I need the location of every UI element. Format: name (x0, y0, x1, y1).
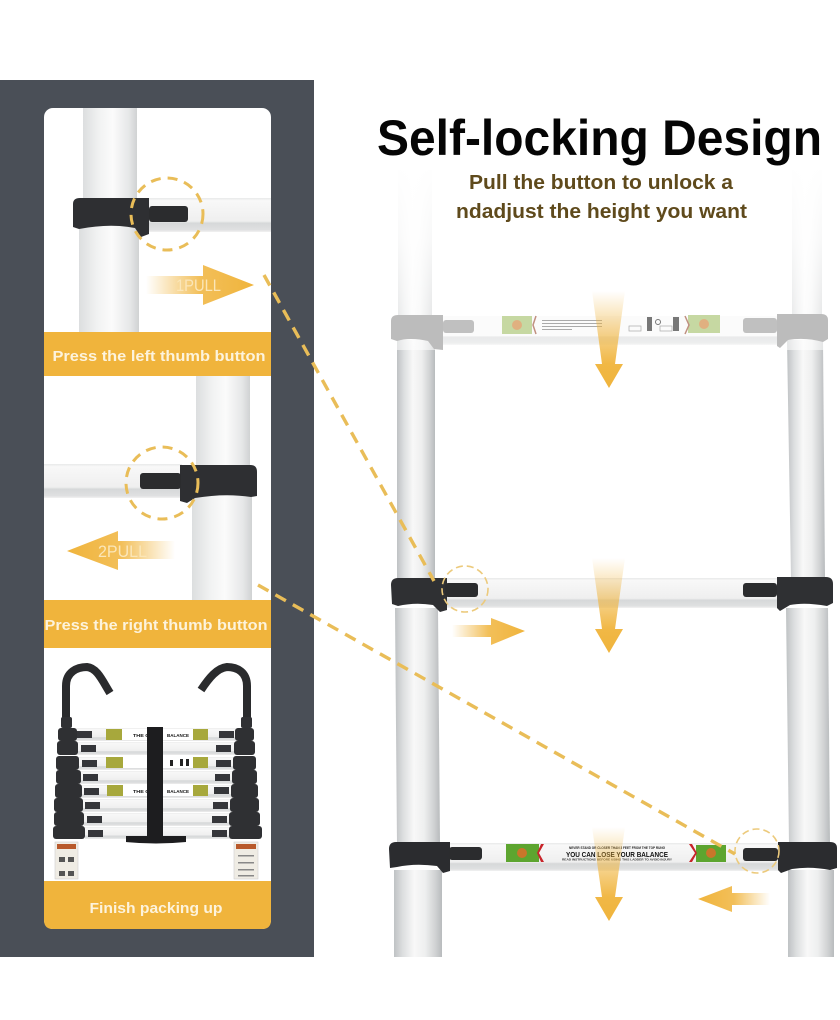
step 2 (44, 376, 271, 648)
arrow: 2PULL (67, 531, 175, 570)
top fade (385, 165, 835, 350)
caption band (44, 881, 271, 929)
rung labels: THE CAN (133, 733, 157, 738)
rung 1 faded (391, 314, 828, 350)
left clamp (389, 842, 450, 873)
rung labels (106, 729, 208, 796)
dashed connector: step 1 (264, 275, 434, 581)
clamp (180, 465, 257, 503)
left clamp stack (53, 728, 85, 839)
rung safety label: READ INSTRUCTIONS BEFORE USING THIS LADDER TO AVOID INJURY (562, 858, 672, 862)
panel: dark sidebar (0, 80, 314, 957)
rung (44, 464, 182, 498)
clamp (73, 198, 149, 237)
pole (79, 108, 139, 332)
pole (192, 376, 252, 600)
main ladder (385, 165, 837, 957)
caption band: Finish packing up (90, 900, 222, 917)
arrow: 2PULL: 2PULL (98, 542, 147, 561)
left pole (394, 170, 442, 957)
title: Self-locking Design (377, 110, 822, 166)
right clamp (778, 842, 837, 873)
step 1 (44, 108, 271, 376)
rung labels: BALANCE (167, 789, 189, 794)
left button (445, 583, 478, 597)
dashed circle (126, 447, 198, 519)
arrow: down 1 (592, 291, 625, 388)
arrow: 1PULL: 1PULL (176, 276, 221, 295)
hooks (66, 667, 247, 720)
rung labels: THE CAN (133, 789, 157, 794)
left clamp (391, 315, 443, 350)
rung label (502, 315, 720, 334)
folded rungs (76, 728, 236, 839)
caption band (44, 600, 271, 648)
panel: white steps card (44, 108, 271, 929)
rung labels: BALANCE (167, 733, 189, 738)
button (149, 206, 188, 222)
right pole (786, 170, 834, 957)
arrow: left on rung 3 (698, 886, 770, 912)
dashed circle: rung 3 (735, 829, 779, 873)
rung (148, 198, 271, 232)
thumb buttons (77, 731, 234, 837)
right clamp (777, 314, 828, 348)
rung 2 (391, 577, 833, 612)
left clamp (391, 578, 447, 612)
arrow: down 2 (592, 558, 625, 653)
left button (443, 320, 474, 333)
rung safety label: YOU CAN LOSE YOUR BALANCE (566, 850, 668, 859)
arrow: down 3 (592, 827, 625, 921)
caption band: Press the right thumb button (44, 617, 268, 634)
rung safety label: NEVER STAND OR CLOSER THAN 3 FEET FROM THE TOP RUNG (569, 846, 665, 850)
rung 3 (389, 842, 837, 873)
button (140, 473, 181, 489)
right clamp (777, 577, 833, 611)
strap (126, 727, 186, 844)
subtitle: Pull the button to unlock a (469, 172, 734, 194)
rung safety label (506, 844, 726, 862)
warning stickers (55, 842, 258, 879)
subtitle (456, 172, 747, 223)
right button (743, 848, 778, 861)
left button (449, 847, 482, 860)
caption band: Press the left thumb button (52, 348, 266, 365)
right clamp stack (229, 728, 262, 839)
subtitle: ndadjust the height you want (456, 201, 747, 223)
dashed connector: step 2 (258, 585, 735, 854)
right button (743, 318, 777, 333)
caption band (44, 332, 271, 376)
arrow: 1PULL (146, 265, 254, 305)
step 3: packed ladder (44, 667, 271, 929)
arrow: right on rung 2 (452, 618, 525, 645)
right button (743, 583, 777, 597)
hook collars (61, 717, 252, 728)
dashed circle: rung 2 (442, 566, 488, 612)
dashed circle (131, 178, 203, 250)
